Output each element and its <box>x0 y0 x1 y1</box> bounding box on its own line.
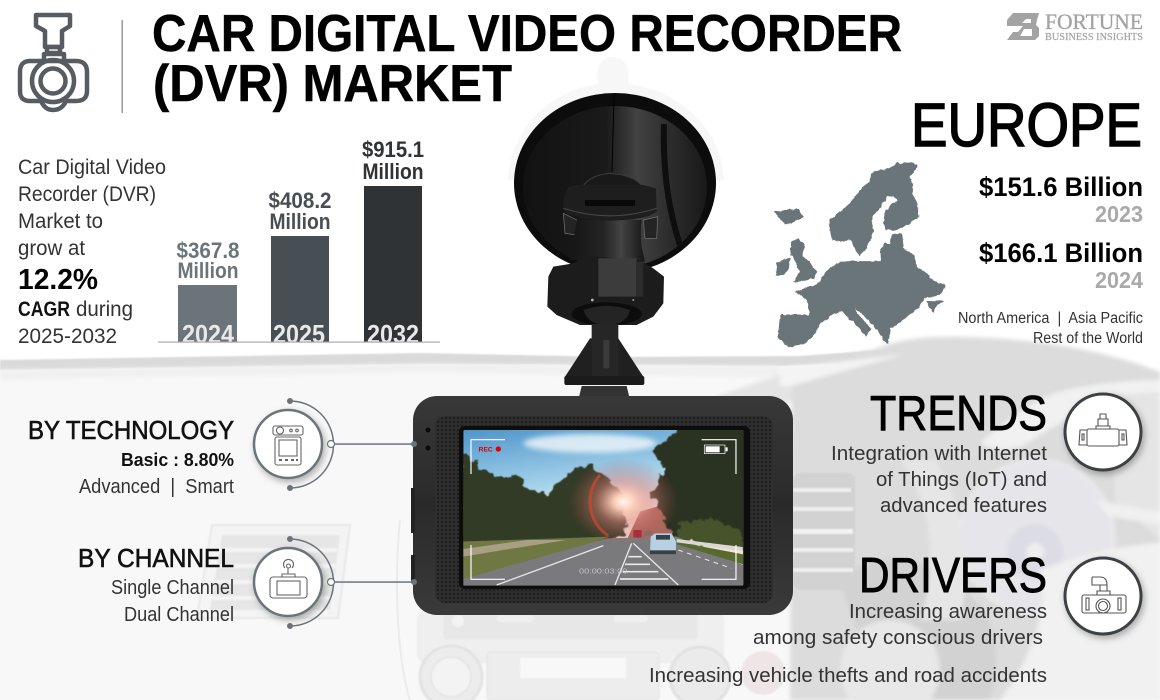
title: CAR DIGITAL VIDEO RECORDER <box>152 5 902 63</box>
category: by technology: Basic : 8.80% <box>121 450 234 470</box>
section: trends: of Things (IoT) and <box>876 468 1047 491</box>
stats: Europe market size: 2024 <box>1095 267 1143 293</box>
photo: road scene on screen <box>460 425 750 586</box>
photo: road scene on screen: 00:00:03:00 <box>579 568 627 575</box>
icon: compact recorder <box>273 426 303 465</box>
section: drivers: among safety conscious drivers <box>753 626 1043 649</box>
map: Europe <box>774 163 944 347</box>
section: trends <box>831 387 1141 517</box>
category: by channel <box>78 536 417 629</box>
section: trends: TRENDS <box>870 387 1047 441</box>
text: CAGR summary: 2025-2032 <box>18 325 117 348</box>
bar: 2025 <box>268 188 332 349</box>
text: CAGR summary: Market to <box>18 210 103 233</box>
text: CAGR summary: Car Digital Video <box>18 156 166 179</box>
title: (DVR) MARKET <box>153 55 512 113</box>
logo: Fortune Business Insights: FORTUNE <box>1045 9 1143 34</box>
category: by technology: BY TECHNOLOGY <box>28 415 234 445</box>
section: drivers <box>649 549 1141 687</box>
stats: Europe market size <box>979 172 1143 293</box>
bar: 2032: 2032 <box>367 319 419 349</box>
bar: 2032 <box>362 137 424 349</box>
stats: Europe market size: 2023 <box>1095 201 1143 227</box>
bar chart: market size <box>158 137 440 349</box>
text: CAGR summary <box>18 156 166 348</box>
photo: dash camera body <box>411 396 793 615</box>
photo: suction mount <box>508 57 724 400</box>
bar: 2025: 2025 <box>273 319 325 349</box>
stats: Europe market size: $151.6 Billion <box>979 172 1143 202</box>
category: by channel: Dual Channel <box>124 604 234 626</box>
text: other regions <box>958 310 1143 347</box>
section: drivers: Increasing awareness <box>849 600 1047 623</box>
bar: 2024: $367.8 <box>176 238 240 263</box>
text: CAGR summary: Recorder (DVR) <box>18 183 156 206</box>
icon: front-lens dash camera <box>1082 577 1126 613</box>
text: CAGR summary: grow at <box>18 237 85 260</box>
section: drivers: Increasing vehicle thefts and road accidents <box>649 664 1047 687</box>
bar: 2032: $915.1 <box>362 137 424 162</box>
bar: 2025: Million <box>270 209 330 234</box>
category: by channel: Single Channel <box>111 577 234 599</box>
section: drivers: DRIVERS <box>859 549 1047 603</box>
stats: Europe market size: $166.1 Billion <box>979 238 1143 268</box>
category: by channel: BY CHANNEL <box>78 543 234 573</box>
bar: 2032: Million <box>362 159 424 184</box>
bar: 2024: Million <box>178 258 238 283</box>
screen overlay: recording frame <box>471 440 736 579</box>
bar: 2024: 2024 <box>182 319 234 349</box>
title <box>152 5 902 113</box>
category: by technology <box>28 398 417 498</box>
photo: road scene on screen: REC <box>479 447 493 453</box>
icon: dual-side dash camera <box>1079 414 1127 446</box>
text: CAGR summary: during <box>76 298 133 321</box>
section: trends: advanced features <box>880 494 1047 517</box>
icon: dash camera (header) <box>20 15 87 110</box>
text: CAGR summary: CAGR <box>18 298 70 321</box>
text: other regions: Rest of the World <box>1033 330 1143 347</box>
bar: 2025: $408.2 <box>268 188 332 213</box>
bar: 2024 <box>176 241 239 342</box>
text: other regions: North America | Asia Pacific <box>958 310 1143 327</box>
logo: Fortune Business Insights: BUSINESS INSIGHTS <box>1045 32 1143 43</box>
logo: Fortune Business Insights <box>1007 9 1143 43</box>
category: by technology: Advanced | Smart <box>79 476 234 498</box>
icon: recorder with antenna <box>270 559 307 598</box>
section: trends: Integration with Internet <box>831 442 1047 465</box>
text: CAGR summary: 12.2% <box>18 264 98 296</box>
